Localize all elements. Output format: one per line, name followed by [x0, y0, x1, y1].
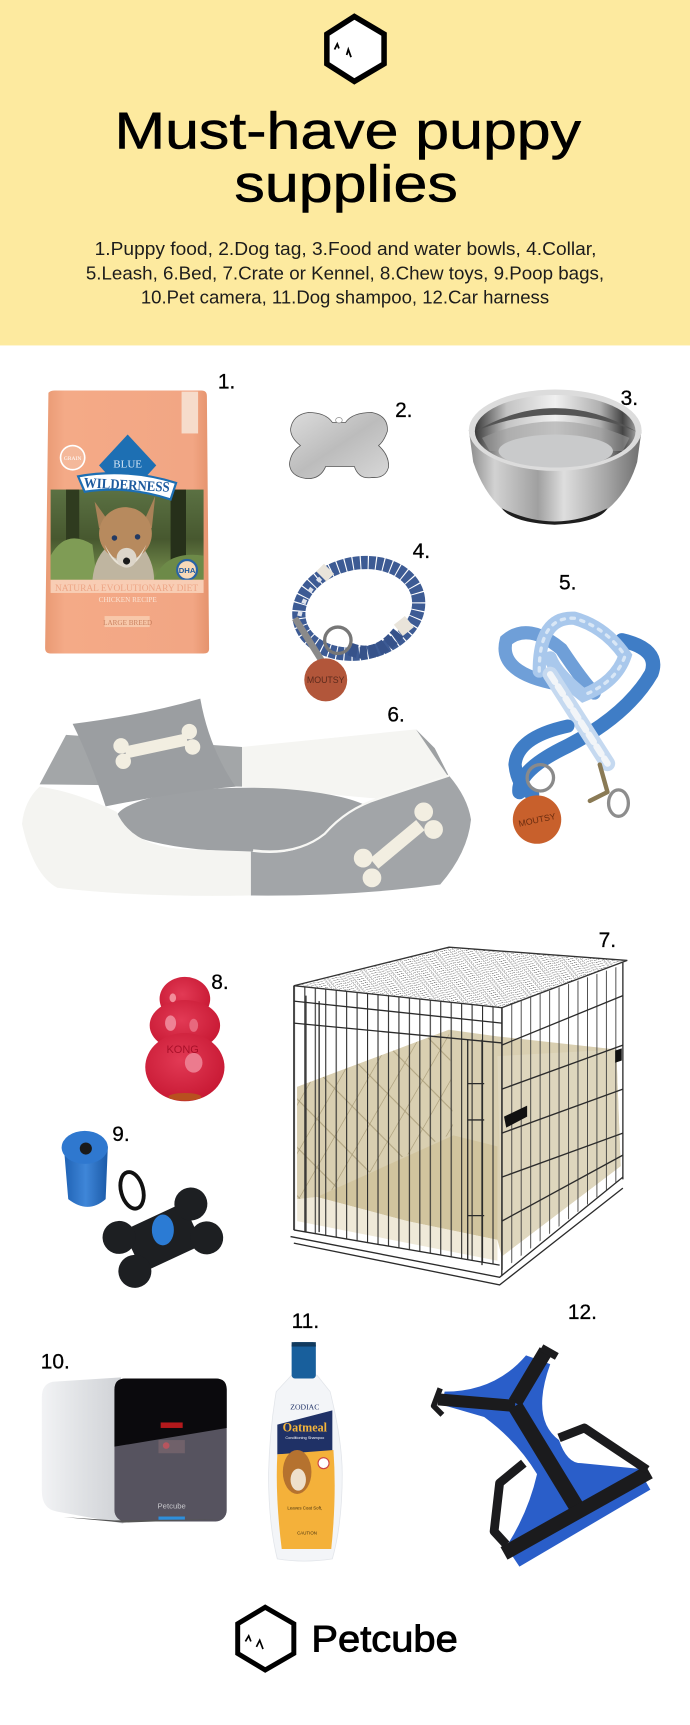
panel: header background	[0, 0, 690, 345]
label: 3.: 3.	[621, 387, 638, 410]
item 4: rope collar	[290, 552, 427, 701]
item 8: red Kong toy	[145, 977, 224, 1101]
label: 8.: 8.	[211, 971, 229, 994]
item 11: oatmeal shampoo bottle: CAUTION	[297, 1531, 317, 1536]
item 1: puppy food bag: WILDERNESS	[83, 475, 170, 496]
item 11: oatmeal shampoo bottle: Conditioning Shampoo	[285, 1436, 324, 1440]
item 9: poop bags and dispenser	[62, 1131, 229, 1293]
item 4: rope collar: MOUTSY	[307, 675, 345, 685]
label: 4.: 4.	[413, 540, 430, 563]
item 1: puppy food bag: GRAIN	[64, 456, 81, 462]
label: 9.: 9.	[112, 1123, 130, 1146]
text block: supplies list	[86, 238, 604, 308]
item 11: oatmeal shampoo bottle: Leaves Coat Soft,	[287, 1505, 322, 1510]
text block: supplies list: 10.Pet camera, 11.Dog shampoo, 12.Car harness	[141, 287, 549, 308]
item 8: red Kong toy: KONG	[166, 1044, 199, 1056]
item 11: oatmeal shampoo bottle: ZODIAC	[290, 1402, 319, 1411]
item 7: wire crate	[291, 947, 627, 1285]
label: 11.: 11.	[292, 1310, 319, 1333]
label: 6.: 6.	[387, 704, 405, 727]
label: 10.: 10.	[41, 1351, 70, 1374]
label: 7.: 7.	[599, 929, 616, 952]
item 10: Petcube camera	[42, 1377, 227, 1524]
label: 12.: 12.	[568, 1301, 597, 1324]
item 1: puppy food bag: BLUE	[113, 459, 142, 471]
item 11: oatmeal shampoo bottle: Oatmeal	[283, 1420, 328, 1434]
item 1: puppy food bag: DHA	[179, 566, 196, 575]
item 12: car harness	[434, 1348, 650, 1567]
label: 1.: 1.	[218, 370, 235, 393]
item 1: puppy food bag: LARGE BREED	[103, 619, 152, 627]
item 5: rope leash	[505, 618, 653, 844]
item 1: puppy food bag: CHICKEN RECIPE	[99, 596, 157, 604]
footer logo: hexagon icon	[238, 1607, 294, 1670]
item 10: Petcube camera: Petcube	[158, 1501, 186, 1510]
icon: Petcube hexagon logo	[327, 17, 384, 81]
text block: supplies list: 5.Leash, 6.Bed, 7.Crate or Kennel, 8.Chew toys, 9.Poop bags,	[86, 262, 604, 283]
title: Must-have puppy	[114, 102, 581, 160]
title: supplies	[234, 154, 458, 212]
title	[114, 102, 581, 212]
item 2: dog tag	[289, 413, 389, 479]
item 11: oatmeal shampoo bottle	[269, 1342, 342, 1561]
label: 2.: 2.	[395, 399, 413, 422]
item 3: steel bowl	[469, 389, 642, 525]
label: 5.: 5.	[559, 572, 576, 595]
text block: supplies list: 1.Puppy food, 2.Dog tag, 3.Food and water bowls, 4.Collar,	[95, 238, 596, 259]
item 6: dog bed	[22, 699, 471, 896]
footer logo: Petcube wordmark: Petcube	[311, 1617, 458, 1659]
item 1: puppy food bag: NATURAL EVOLUTIONARY DIET	[55, 583, 198, 594]
item 1: puppy food bag	[45, 391, 209, 653]
item 5: rope leash: MOUTSY	[518, 811, 557, 829]
